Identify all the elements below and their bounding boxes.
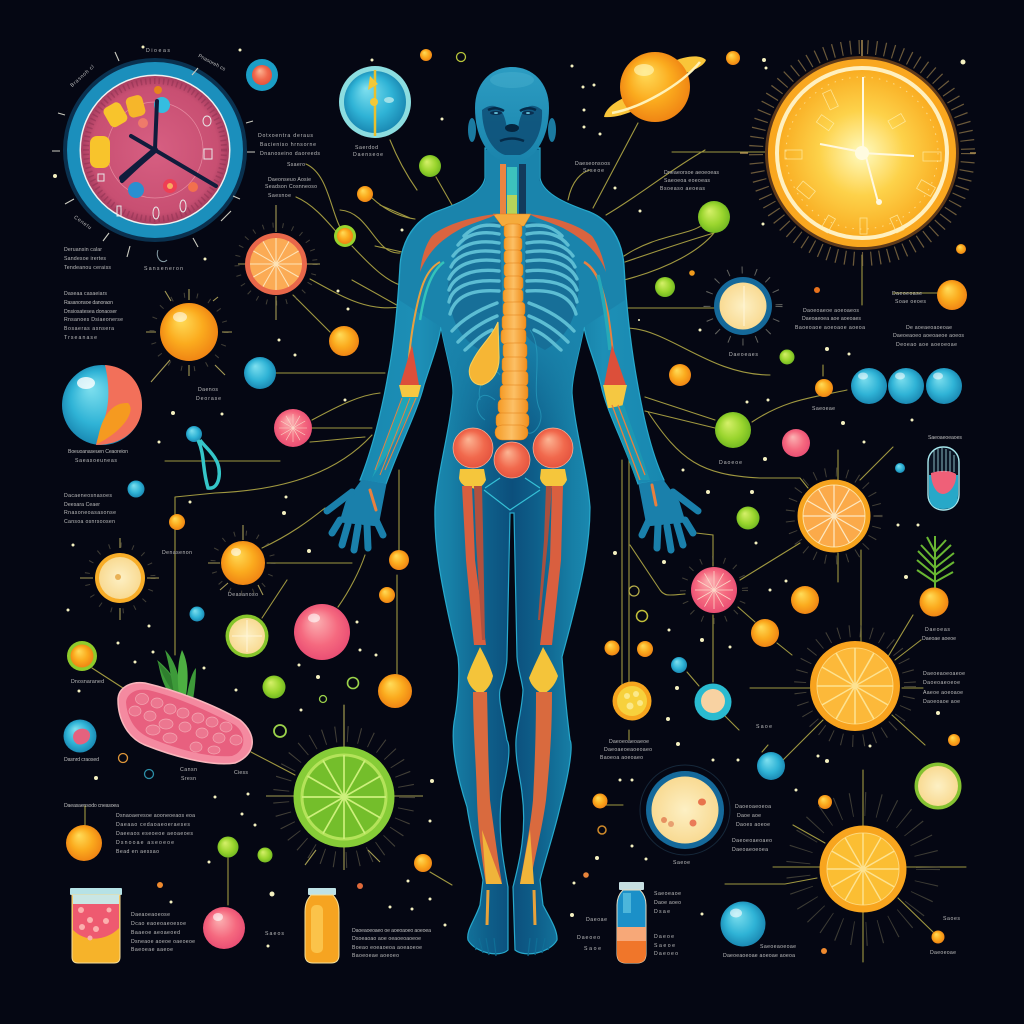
- right column labels: Daeoeaoeoae aoeoae aoeoa: [723, 953, 795, 959]
- left column labels: Ssaero: [287, 162, 305, 168]
- clock rim labels: Deruansin calar: [64, 247, 102, 253]
- liver: [469, 322, 499, 385]
- right column labels: Saoes: [943, 916, 960, 922]
- left column labels: Seadson Cosnneoso: [265, 184, 317, 190]
- left column labels: Daeonseuo Aosie: [268, 177, 311, 183]
- icon: right balls: [583, 51, 967, 954]
- icon: teal globe: [339, 66, 411, 138]
- right column labels: Baoeoaoe aoeoaoe aoeoa: [795, 325, 865, 331]
- left column labels: Cansoa osnrsoosen: [64, 519, 115, 525]
- left column labels: Ciess: [234, 770, 248, 776]
- left column labels: Saerdod: [355, 145, 378, 151]
- right column labels: Daeoeaes: [729, 352, 758, 358]
- icon: sun clock: [740, 40, 976, 259]
- right column labels: [575, 161, 965, 959]
- left column labels: Denasenon: [162, 550, 192, 556]
- head: [468, 67, 556, 163]
- left column labels: Saeos: [265, 931, 284, 937]
- left column labels: Daenseoe: [353, 152, 383, 158]
- left column labels: Daeaoeaoeose: [131, 912, 170, 918]
- left column labels: Deorase: [196, 396, 221, 402]
- clock rim labels: Tendeanou ceraiss: [64, 265, 111, 271]
- left column labels: Daoeaoeoaeo oe aoeoaoeo aoeoea: [352, 928, 431, 934]
- clock rim labels: Dioeas: [146, 48, 170, 54]
- right column labels: Daeoae: [586, 917, 607, 923]
- right column labels: Saoe: [756, 724, 772, 730]
- right column labels: Daoeoe: [719, 460, 742, 466]
- clock rim labels: Brasnoh cl: [69, 64, 96, 89]
- right column labels: Daoeoaeoeoa: [735, 804, 771, 810]
- right column labels: Daeoeoaeoaeo: [732, 838, 772, 844]
- right column labels: Daeoaeoeoea: [732, 847, 768, 853]
- connector lines: [85, 123, 966, 962]
- icon: cream ball with blue ring: [707, 270, 779, 342]
- left column labels: Daeaao cedaoaeoeraeses: [116, 822, 190, 828]
- chest shading: [399, 150, 625, 440]
- icon: pine with orange: [917, 536, 954, 616]
- icon: small ringed ball: [246, 59, 278, 91]
- right column labels: Saeoe: [654, 943, 675, 949]
- right column labels: Bsoeaso aeoeas: [660, 186, 705, 192]
- left column labels: Trseanase: [64, 335, 97, 341]
- left column labels: Dnosnaraned: [71, 679, 104, 685]
- icon: jar: [70, 888, 122, 963]
- right column labels: Daoe aoeo: [654, 900, 681, 906]
- right column labels: Srseoe: [583, 168, 604, 174]
- icon: blue-red sphere: [62, 365, 142, 445]
- icon: blue orange vial: [617, 882, 646, 963]
- left column labels: Bosaeras asnsera: [64, 326, 114, 332]
- left column labels: Baeoeae aaeoe: [131, 947, 173, 953]
- right column labels: Saeoe: [673, 860, 690, 866]
- icon: orange slice upper left: [237, 205, 320, 320]
- icon: orange bottle: [305, 888, 339, 963]
- left column labels: Dotxoentra deraus: [258, 133, 313, 139]
- clock rim labels: [64, 48, 227, 272]
- right column labels: Daeoeaoeoaeoe: [923, 671, 965, 677]
- left column labels: Deesara Ceaer: [64, 502, 100, 508]
- right column labels: Saeoeae: [812, 406, 835, 412]
- icon: plant sprout: [157, 650, 196, 705]
- right column labels: Daeoe: [654, 934, 674, 940]
- spine column: [493, 214, 531, 440]
- left column labels: Daenos: [198, 387, 218, 393]
- right column labels: Daeoeo: [577, 935, 600, 941]
- icon: green-rim cream ball: [914, 762, 962, 810]
- left column labels: Baoeoeae aoeoeo: [352, 953, 399, 959]
- left column labels: Boeuoanaseuen Ceaoreion: [68, 449, 128, 455]
- icon: capsule: [928, 447, 959, 510]
- left column labels: Bacieniso hrnsorne: [260, 142, 316, 148]
- right column labels: Daeoae aoeoe: [922, 636, 956, 642]
- icon: pink kidney organ: [118, 683, 252, 764]
- right column labels: Dsae: [654, 909, 670, 915]
- right column labels: Aaeoe aoeoaoe: [923, 690, 963, 696]
- icon: pink citrus: [274, 409, 312, 447]
- leg muscles: [462, 486, 563, 925]
- left column labels: Dacaeneosnasoes: [64, 493, 112, 499]
- icon: big orange slice: [800, 631, 910, 741]
- left column labels: Dsoeaoao aoe oeaoeoaoeoe: [352, 936, 421, 942]
- right column labels: Daeseonsoos: [575, 161, 610, 167]
- right column labels: Saeoeaoeoae: [760, 944, 796, 950]
- left column labels: Boeao eoeaoeoa aoeaoeoe: [352, 945, 422, 951]
- icon: hook tube: [186, 426, 219, 488]
- background dots: [53, 46, 966, 948]
- right column labels: Daeoeoase: [892, 291, 922, 297]
- left column labels: Daeasaensodo cneasoea: [64, 803, 119, 809]
- icon: three blue spheres: [851, 368, 962, 404]
- toes: [472, 935, 552, 956]
- right column labels: Daeoaeoea aoe aoeoaes: [802, 316, 861, 322]
- right column labels: De aoeaeoaoeoae: [906, 325, 952, 331]
- icon: cream cell with blue ring: [640, 765, 730, 855]
- right column labels: Saeoeaoe: [654, 891, 681, 897]
- right column labels: Daeoeoaeoaeoe: [609, 739, 649, 745]
- icon: orange ball bottom left: [66, 825, 102, 861]
- left column labels: Rnsanoes Dsiaeonerse: [64, 317, 123, 323]
- right column labels: Dneaeorsoe aeoeoeas: [664, 170, 719, 176]
- icon: pink ball bottom: [203, 907, 245, 949]
- right column labels: Daoe aoe: [737, 813, 761, 819]
- right column labels: Daeoeoae: [930, 950, 956, 956]
- icon: orange sun slice: [798, 804, 928, 934]
- human body: [327, 67, 698, 956]
- icon: saturn: [604, 52, 706, 122]
- left column labels: [64, 133, 431, 959]
- right column labels: Daeoeo: [654, 951, 678, 957]
- icon: yellow cell: [612, 682, 652, 720]
- right column labels: Daoes aoeoe: [736, 822, 770, 828]
- right hand: [639, 480, 698, 550]
- clock rim labels: Cenetu: [73, 215, 92, 231]
- icon: yellow slice: [80, 538, 159, 620]
- right column labels: Soae oeoes: [895, 299, 926, 305]
- left column labels: Dsneaoe aoeoe oaeoeoe: [131, 939, 195, 945]
- body silhouette: [360, 148, 664, 954]
- left column labels: Dasnrd craosed: [64, 757, 99, 763]
- right column labels: Daoeoaeoe aoeoaeos: [803, 308, 859, 314]
- icon: small balls left: [118, 49, 466, 889]
- left column labels: Dnsiosatesea donaoser: [64, 309, 117, 315]
- clock rim labels: Sandesoe irertes: [64, 256, 106, 262]
- abdomen lines: [477, 330, 541, 433]
- icon: cream green ball: [226, 614, 268, 658]
- left column labels: Saesnoe: [268, 193, 291, 199]
- right column labels: Baoeoa aoeoaeo: [600, 755, 643, 761]
- icon: sun ball: [146, 289, 232, 382]
- icon: teal cream ball: [694, 684, 732, 720]
- left column labels: Dnanoseino daoreeds: [260, 151, 320, 157]
- right column labels: Daeoeas: [925, 627, 950, 633]
- left column labels: Dsnooae aseoeoe: [116, 840, 174, 846]
- left column labels: Rnasoneoasasonse: [64, 510, 116, 516]
- left column labels: Rasanonsoe danoraon: [64, 300, 113, 306]
- right column labels: Deoeao aoe aoeoeoae: [896, 342, 957, 348]
- icon: pink ball: [294, 604, 350, 660]
- left column labels: Deasanoso: [228, 592, 258, 598]
- icon: pink citrus right: [683, 559, 745, 621]
- right column labels: Daeoeaoeo aoeoaeoe aoeos: [893, 333, 964, 339]
- right column labels: Saoe: [584, 946, 601, 952]
- right arm muscles: [529, 214, 650, 480]
- ribcage: [448, 222, 579, 350]
- right column labels: Daoeoaoe aoe: [923, 699, 960, 705]
- left column labels: Saeasoeuneas: [75, 458, 117, 464]
- left column labels: Baaeoe aeoaeoed: [131, 930, 180, 936]
- left column labels: Daseaa casaeiars: [64, 291, 107, 297]
- icon: blue sphere bottom: [720, 902, 766, 946]
- pelvic organs: [453, 428, 573, 510]
- icon: pink clock: [52, 52, 255, 262]
- left column labels: Cansn: [180, 767, 197, 773]
- right column labels: Saeoaeoeaoes: [928, 435, 962, 441]
- left hand: [327, 480, 386, 550]
- left column labels: Dcao eaoeoaeoesoe: [131, 921, 186, 927]
- right column labels: Saeoeoa eoeoeas: [664, 178, 710, 184]
- neck structures: [500, 164, 526, 216]
- clock rim labels: Sanseneron: [144, 266, 183, 272]
- icon: green yolk: [67, 641, 97, 671]
- left arm muscles: [372, 214, 497, 478]
- icon: teal-red ball: [64, 720, 96, 752]
- left column labels: Sresn: [181, 776, 196, 782]
- right column labels: Daoeoaeoeoe: [923, 680, 960, 686]
- right column labels: Daeoaeoeaoeoaeo: [604, 747, 652, 753]
- icon: lime slice: [266, 705, 423, 870]
- clock rim labels: Pnasoreh cs: [197, 53, 227, 73]
- icon: green balls bottom: [218, 836, 432, 872]
- icon: orange ball with rays: [208, 525, 273, 595]
- left column labels: Daeeaos eseoeoe aeoaeoes: [116, 831, 193, 837]
- left column labels: Dsnaoaeresoe aooneoeaos eoa: [116, 813, 195, 819]
- icon: orange slice right: [790, 472, 878, 560]
- left column labels: Bead en aessao: [116, 849, 159, 855]
